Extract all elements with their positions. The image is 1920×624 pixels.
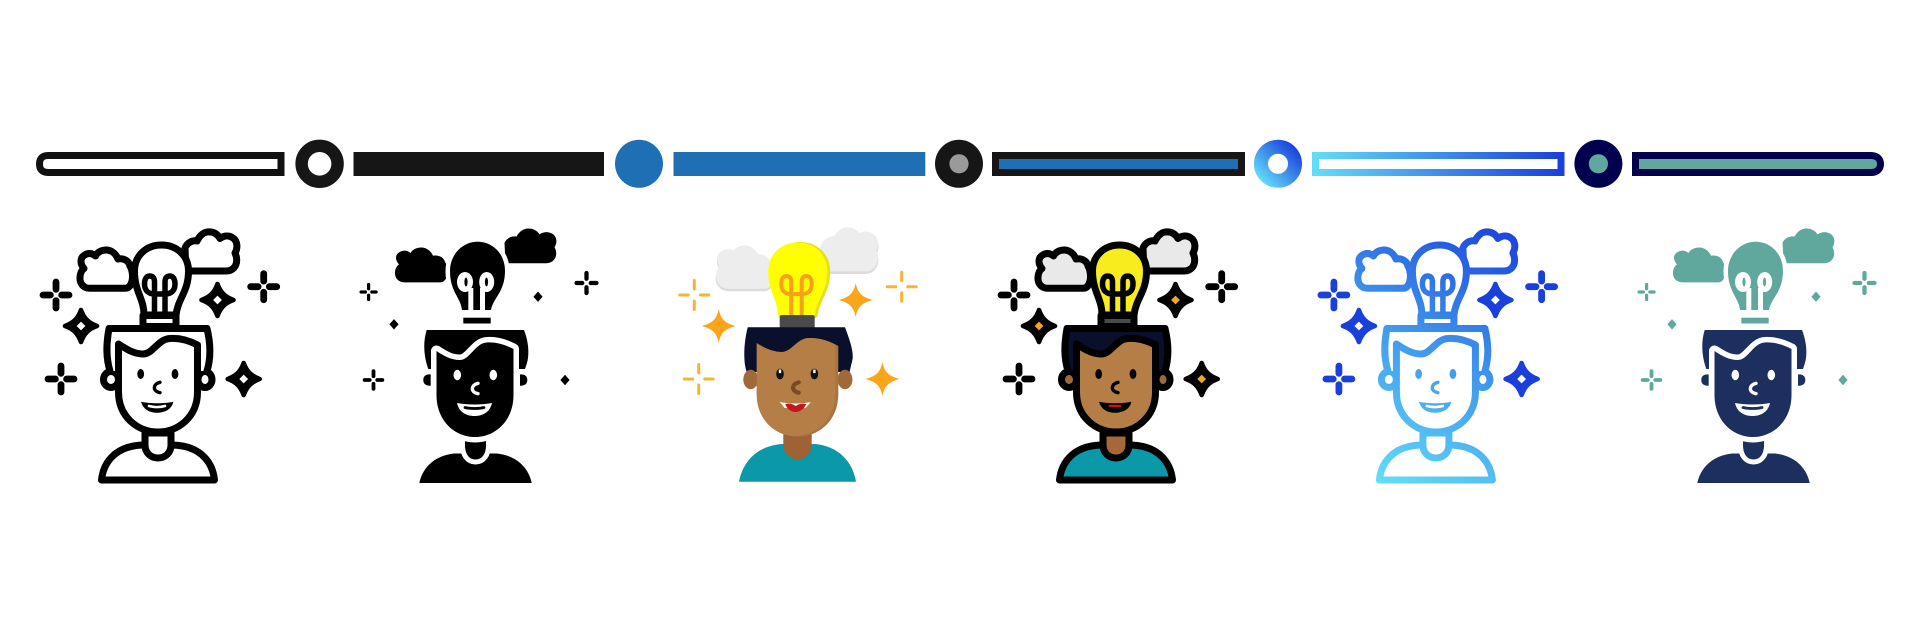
light bulb: [450, 242, 505, 324]
node 4: [1261, 147, 1295, 181]
person: [1697, 330, 1810, 483]
sparkles: [361, 273, 596, 389]
bar 5: gradient outline: [1316, 156, 1561, 172]
icon 4: filled outline: [1001, 232, 1235, 480]
person: [419, 330, 532, 483]
timeline strip: [40, 140, 1880, 188]
person: [739, 327, 856, 482]
sparkles: [1639, 273, 1874, 389]
person: [102, 328, 214, 480]
node 2: [615, 140, 663, 188]
person: [1379, 328, 1492, 480]
sparkles: [1321, 274, 1555, 395]
node 5: [1574, 140, 1622, 188]
bar 4: blue with black outline: [996, 156, 1242, 172]
sparkles: [680, 272, 916, 396]
icon 3: flat colour: [680, 230, 916, 482]
icon 1: outline: [43, 232, 277, 480]
bar 3: solid blue: [674, 152, 925, 176]
light bulb: [771, 245, 827, 329]
sparkles: [1001, 274, 1235, 395]
icon 5: blue gradient outline: [1321, 232, 1555, 480]
node 1: [302, 146, 338, 182]
clouds: [1038, 232, 1195, 288]
person: [1060, 328, 1172, 480]
icon 2: black glyph: [361, 228, 596, 483]
bar 1: outline: [40, 156, 281, 172]
light bulb: [1728, 242, 1783, 324]
clouds: [1358, 232, 1515, 288]
clouds: [1673, 228, 1834, 282]
light bulb: [1092, 245, 1146, 326]
sparkles: [43, 274, 277, 395]
bar 2: solid black: [354, 152, 604, 176]
clouds: [80, 232, 237, 288]
light bulb: [134, 245, 188, 326]
light bulb: [1412, 245, 1466, 326]
icon 6: navy and teal glyph: [1639, 228, 1874, 483]
bar 6: teal with navy outline: [1636, 156, 1880, 172]
clouds: [395, 228, 556, 282]
clouds: [719, 230, 876, 288]
node 3: [935, 140, 983, 188]
